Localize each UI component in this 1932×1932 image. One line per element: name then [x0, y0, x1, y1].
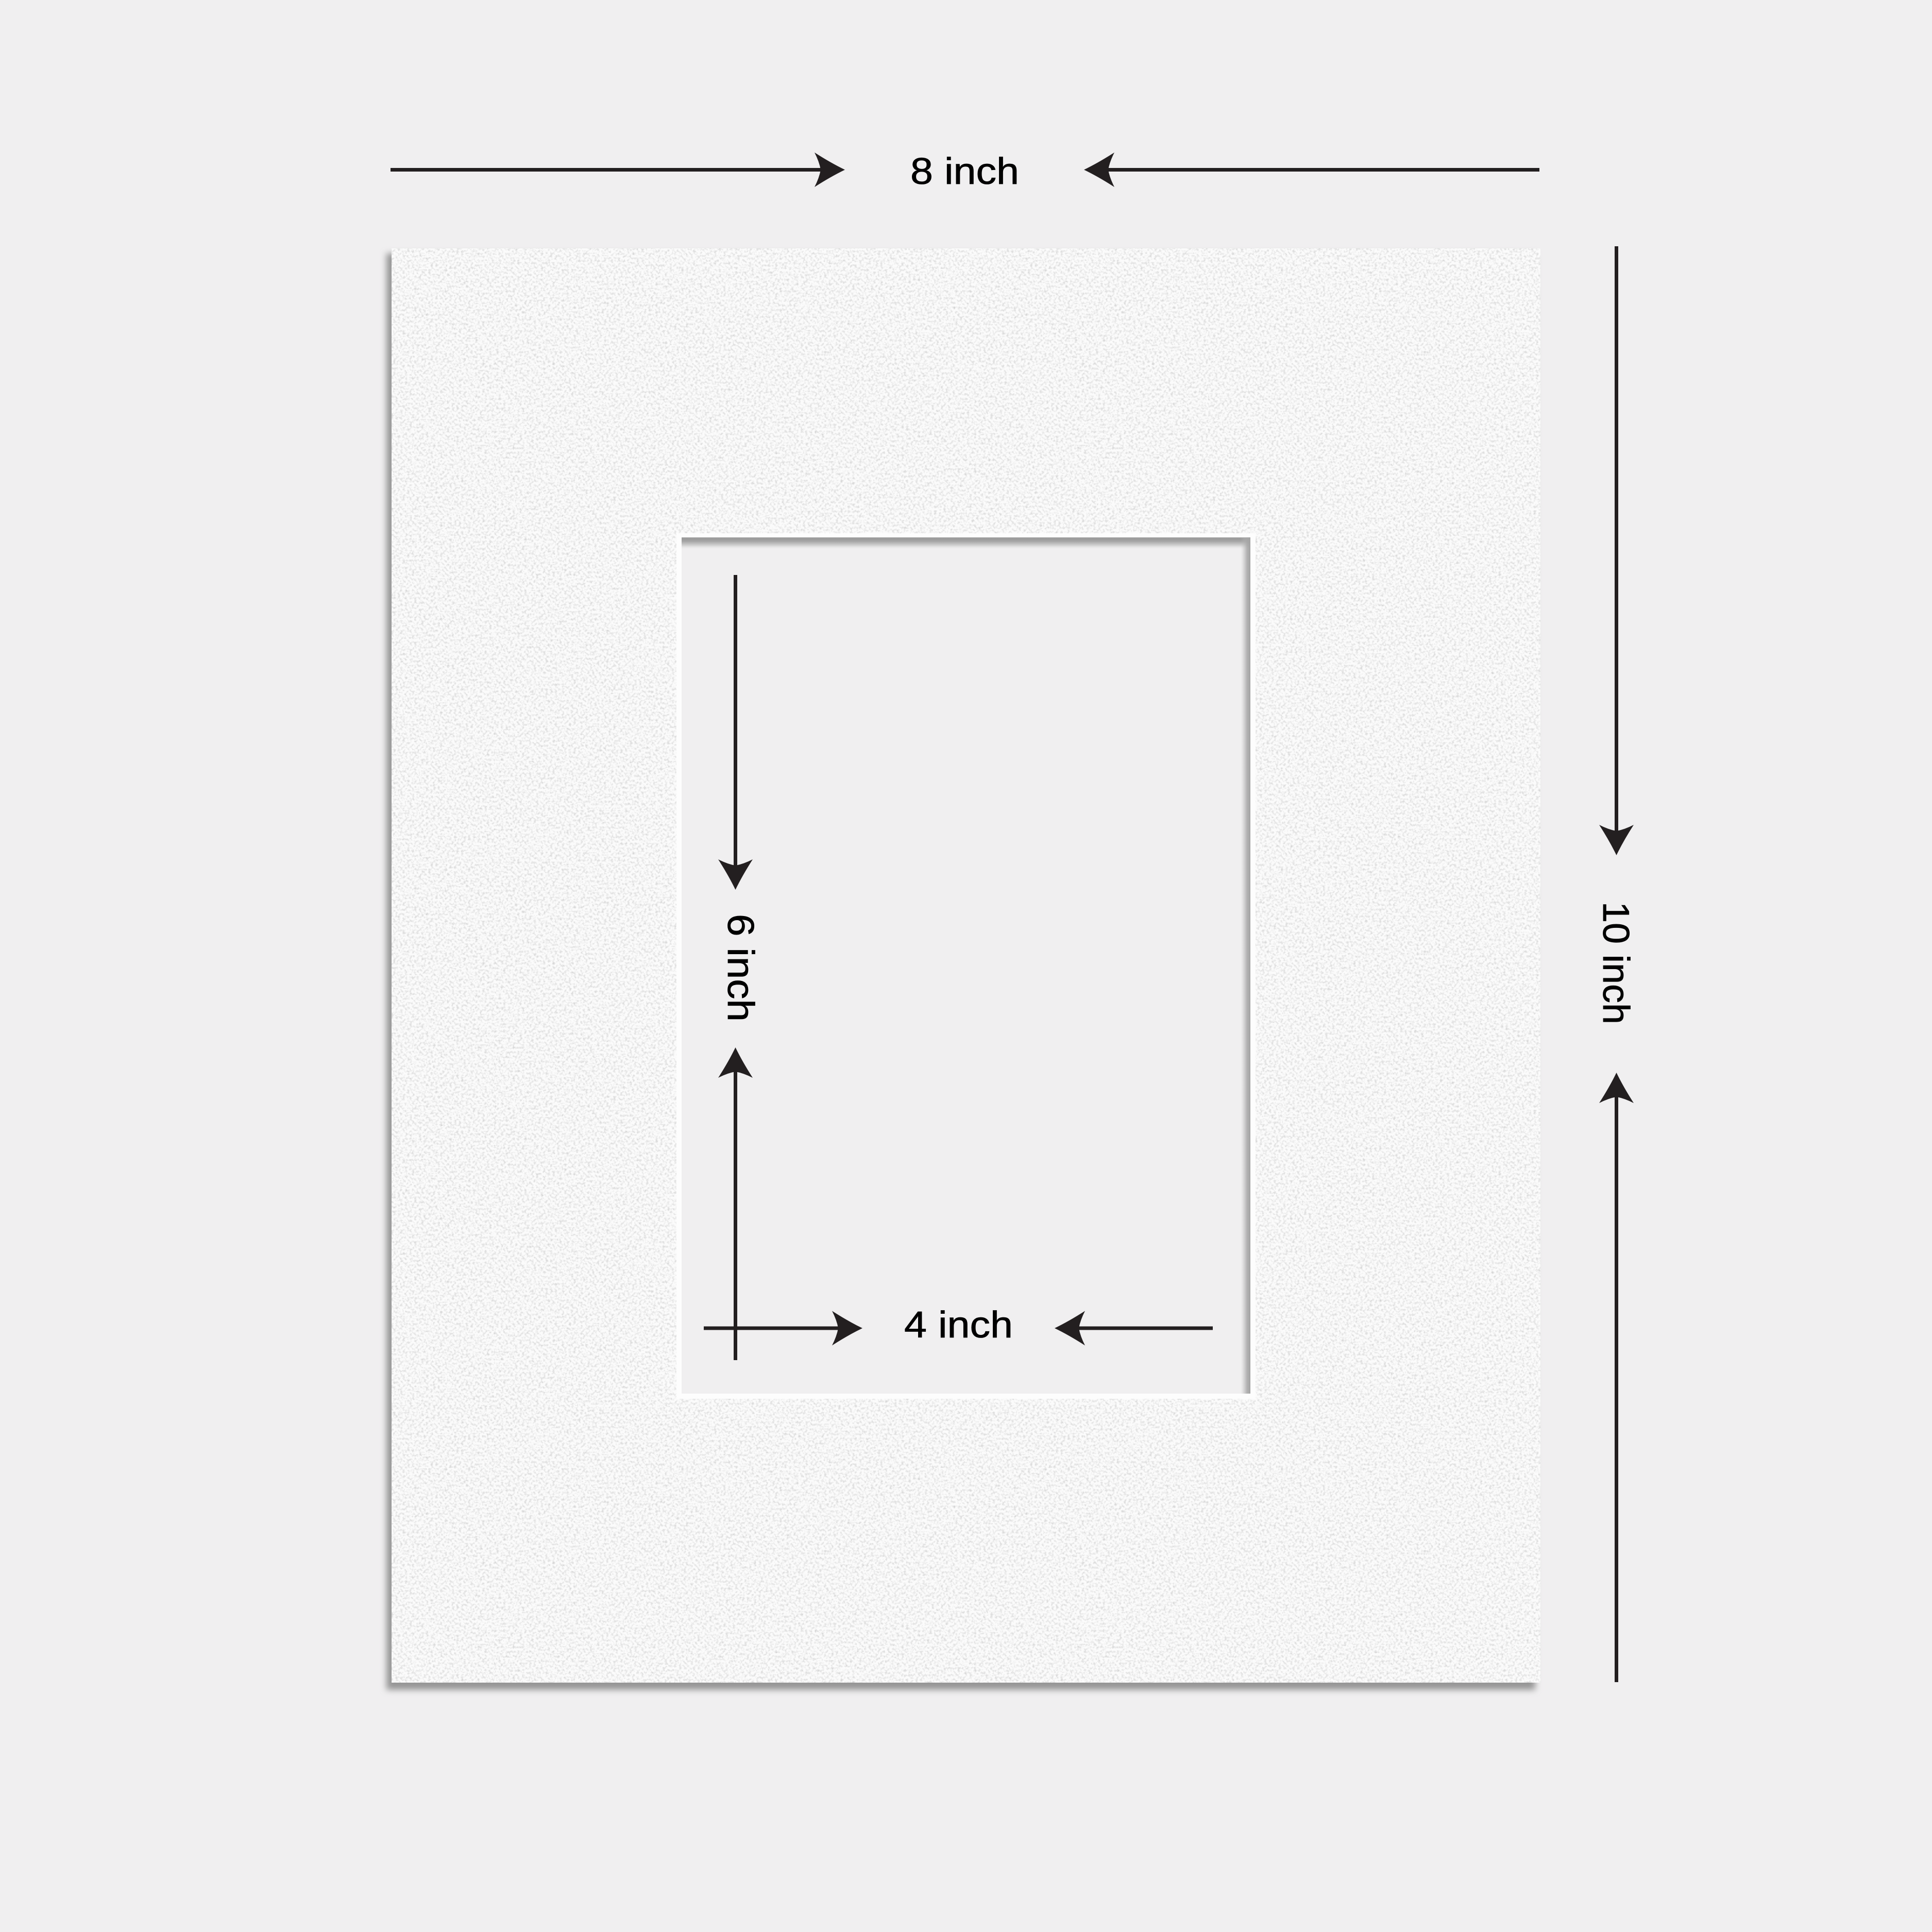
arrow: 4 inch left — [704, 1311, 862, 1346]
arrow: 8 inch right — [1084, 152, 1539, 187]
label: 4 inch: 4 inch — [904, 1304, 1013, 1346]
arrow: 6 inch top — [718, 575, 753, 890]
label: 8 inch: 8 inch — [910, 151, 1019, 192]
arrow: 8 inch left — [391, 152, 845, 187]
mat surface — [392, 248, 1540, 1683]
arrow: 6 inch bottom — [718, 1047, 753, 1360]
label: 6 inch: 6 inch — [720, 914, 761, 1022]
window opening — [682, 537, 1250, 1394]
mat drop shadow — [386, 253, 1535, 1690]
window bevel — [676, 533, 1256, 1399]
label: 10 inch: 10 inch — [1595, 902, 1636, 1024]
panel: mat board — [386, 248, 1540, 1690]
arrow: 4 inch right — [1055, 1311, 1213, 1346]
mat paper grain — [392, 248, 1540, 1683]
arrow: 10 inch bottom — [1599, 1073, 1634, 1682]
window right inner shadow — [1241, 537, 1250, 1394]
window top inner shadow — [682, 537, 1250, 549]
arrow: 10 inch top — [1599, 246, 1634, 855]
